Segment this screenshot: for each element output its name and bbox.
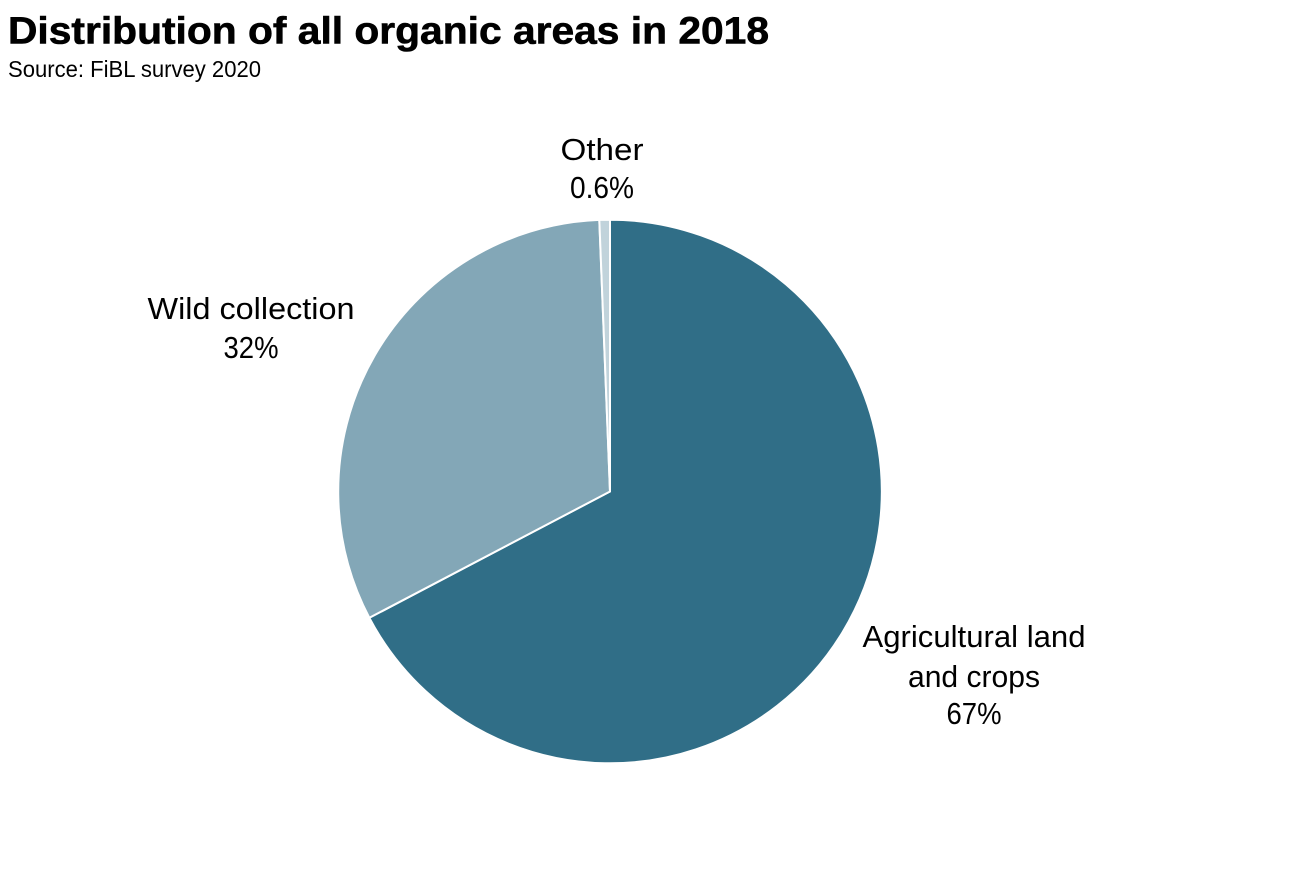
label: wild collection: Wild collection [148, 291, 354, 326]
slice: wild collection [338, 220, 610, 618]
label: other: 0.6% [570, 170, 634, 205]
label: agricultural land and crops: 67% [946, 696, 1002, 731]
slice: other [599, 220, 610, 492]
label: agricultural land and crops: and crops [908, 659, 1040, 694]
label: agricultural land and crops [862, 619, 1086, 731]
source line: Source: FiBL survey 2020 [8, 56, 261, 82]
pie chart [338, 220, 882, 763]
label: agricultural land and crops: Agricultural land [862, 619, 1086, 654]
label: other [560, 132, 644, 205]
label: wild collection: 32% [224, 330, 278, 365]
title: Distribution of all organic areas in 2018 [8, 10, 769, 52]
label: other: Other [560, 132, 644, 167]
label: wild collection [148, 291, 354, 365]
slice: agricultural land and crops [369, 220, 882, 763]
